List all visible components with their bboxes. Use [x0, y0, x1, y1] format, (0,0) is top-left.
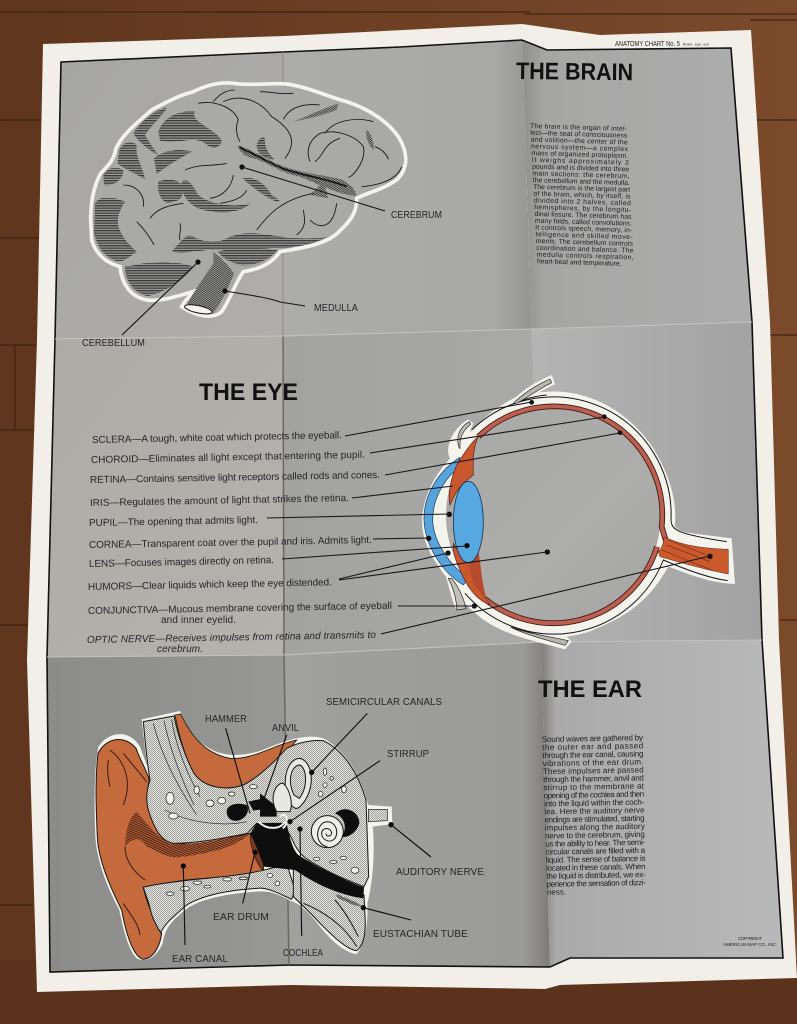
auditory nerve	[368, 809, 387, 822]
lens	[453, 481, 483, 563]
text block: ear description: endings are stimulated, starting	[544, 814, 645, 824]
diagram: brain	[91, 83, 406, 316]
text block: ear description: nerve to the cerebrum, giving	[545, 830, 645, 841]
eustachian tube bone	[293, 865, 365, 951]
text block: ear description: vibrations of the ear drum.	[543, 757, 644, 768]
text block: ear description: us the ability to hear. The semi-	[545, 838, 646, 849]
text block: eye part definitions: OPTIC NERVE—Receives impulses from retina and transmits to	[87, 630, 376, 646]
medulla cut	[184, 303, 213, 316]
text block: brain description: coordination and balance. The	[536, 245, 634, 255]
text block: eye part definitions: IRIS—Regulates the amount of light that strikes the retina.	[90, 493, 349, 509]
choroid and retina ring	[477, 406, 667, 623]
ear labels: HAMMER	[205, 714, 247, 725]
optic nerve	[658, 537, 728, 574]
text block: brain description: ments. The cerebellum controls	[536, 238, 634, 248]
text block: brain description: main sections: the cerebrum,	[532, 170, 630, 180]
text block: ear description: Sound waves are gathered by	[542, 733, 643, 744]
outer ear orange	[96, 739, 264, 959]
ear dots	[181, 770, 394, 910]
text block: eye part definitions: cerebrum.	[157, 644, 203, 655]
diagram: eye cross-section	[422, 375, 735, 649]
cornea	[424, 457, 468, 585]
text block: brain description: mass of organized protoplasm.	[531, 150, 629, 160]
text block: brain description: heart-beat and temperature.	[537, 258, 622, 268]
copyright note: AMERICAN MAP CO., INC.	[723, 942, 777, 947]
text block: brain description: lect—the seat of consciousness	[530, 130, 628, 140]
label: cerebellum: CEREBELLUM	[82, 338, 145, 349]
text block: brain description: medulla controls respiration,	[537, 252, 634, 261]
ear labels: EUSTACHIAN TUBE	[373, 929, 468, 940]
ear labels	[172, 697, 484, 965]
brain silhouette	[91, 83, 406, 316]
text block: ear description: perience the sensation of dizzi-	[547, 878, 646, 889]
eardrum	[250, 833, 264, 872]
text block: ear description: the outer ear and passed	[542, 741, 643, 752]
ossicle stapes	[258, 815, 287, 828]
eye dots	[426, 400, 713, 609]
upper eyelid	[513, 379, 552, 403]
text block: brain description: dinal fissure. The cerebrum has	[534, 211, 632, 221]
text block: brain description: of the brain, which, by itself, is	[533, 191, 631, 201]
text block: brain description: It controls speech, memory, in-	[535, 224, 632, 234]
text block: ear description: the liquid is distributed, we ex-	[546, 870, 646, 881]
text block: ear description: stirrup to the membrane at	[543, 782, 645, 792]
text block: brain description: The cerebrum is the largest part	[533, 184, 630, 194]
text block: brain description: divided into 2 halves, called	[534, 197, 631, 207]
text block: ear description: ness.	[547, 888, 566, 897]
ear labels: EAR CANAL	[172, 954, 228, 965]
ear labels: STIRRUP	[387, 749, 429, 760]
ear folds	[108, 750, 147, 935]
leader lines: brain	[122, 164, 385, 335]
title: the brain: THE BRAIN	[516, 58, 633, 86]
text block: brain description: many folds, called convolutions.	[535, 218, 632, 228]
chart number header: Brain, eye, ear	[683, 42, 710, 46]
text block: brain description: telligence and skilled move-	[536, 231, 633, 241]
ear leader lines	[183, 713, 431, 945]
text block: eye part definitions: HUMORS—Clear liquids which keep the eye distended.	[88, 577, 332, 593]
text block: ear description: These impulses are passed	[543, 765, 644, 776]
semicircular canals	[273, 758, 311, 812]
diagram: ear cross-section	[95, 711, 431, 960]
text block: brain description	[526, 123, 638, 268]
text block: brain description: and volition—the center of the	[531, 137, 628, 146]
ear labels: EAR DRUM	[213, 912, 269, 923]
text block: ear description: lea. Here the auditory nerve	[544, 806, 645, 816]
text block: ear description	[542, 733, 647, 897]
text block: eye part definitions: PUPIL—The opening that admits light.	[89, 515, 258, 529]
text block: brain description: pounds and is divided into three	[532, 164, 629, 173]
copyright note: COPYRIGHT	[738, 936, 762, 941]
text block: brain description: It weighs approximately 3	[532, 157, 629, 167]
text block: eye part definitions: SCLERA—A tough, white coat which protects the eyeball.	[92, 430, 342, 446]
ear canal shading	[125, 812, 249, 857]
text block: ear description: through the hammer, anvil and	[543, 773, 644, 784]
text block: eye part definitions: CHOROID—Eliminates all light except that entering the pupil.	[91, 450, 365, 466]
top orange area	[175, 714, 297, 788]
ear labels: AUDITORY NERVE	[396, 867, 484, 878]
iris upper and ciliary	[449, 437, 478, 505]
text block: eye part definitions: CORNEA—Transparent coat over the pupil and iris. Admits light.	[89, 535, 372, 551]
leader lines: eye	[267, 402, 710, 634]
bottom lid	[511, 627, 568, 645]
eye white outline	[422, 375, 735, 649]
ear labels: SEMICIRCULAR CANALS	[326, 697, 442, 708]
text block: ear description: circular canals are filled with a	[546, 846, 646, 857]
sclera outline	[465, 395, 728, 642]
title: the ear: THE EAR	[538, 676, 642, 703]
text block: eye part definitions: CONJUNCTIVA—Mucous membrane covering the surface of eyeball	[88, 601, 392, 617]
text block: brain description: nervous system—a complex	[531, 143, 629, 153]
text block: eye part definitions: LENS—Focuses images directly on retina.	[89, 555, 274, 570]
eyeball interior	[446, 408, 661, 623]
hammer	[227, 793, 277, 821]
title: the eye: THE EYE	[199, 379, 298, 406]
label: cerebrum: CEREBRUM	[391, 210, 442, 221]
text block: brain description: the cerebellum and the medulla.	[533, 177, 630, 187]
brain shading	[94, 103, 374, 313]
chart number header: ANATOMY CHART No. 5	[615, 41, 680, 48]
cochlea spiral	[311, 816, 343, 848]
text block: ear description: liquid. The sense of balance is	[546, 854, 646, 865]
text block: brain description: The brain is the organ of intel-	[530, 123, 627, 133]
text block: brain description: hemispheres, by the longitu-	[534, 204, 631, 214]
ear labels: COCHLEA	[283, 948, 323, 959]
text block: eye part definitions: RETINA—Contains sensitive light receptors called rods and cones.	[90, 470, 380, 486]
lower lid	[448, 578, 466, 610]
label: medulla: MEDULLA	[314, 303, 358, 314]
cochlea black shading	[335, 809, 359, 837]
brain sulci	[123, 90, 402, 245]
ear white outline	[95, 711, 392, 960]
small upper lid	[458, 422, 471, 448]
copyright note	[723, 936, 777, 947]
upper temporal bone	[143, 716, 369, 887]
ear labels: ANVIL	[272, 723, 299, 734]
text block: ear description: located in these canals. When	[546, 862, 646, 873]
text block: eye part definitions: and inner eyelid.	[161, 615, 236, 626]
bone air cells	[166, 768, 359, 895]
text block: ear description: into the liquid within the coch-	[544, 798, 645, 808]
text block: eye part definitions	[87, 430, 392, 655]
bone canal lines	[153, 719, 247, 824]
iris lower and ciliary	[453, 543, 490, 605]
text block: ear description: opening of the cochlea and then	[544, 790, 644, 800]
text block: ear description: through the ear canal, causing	[542, 749, 644, 760]
text block: ear description: impulses along the auditory	[545, 822, 645, 833]
middle ear black cavity	[250, 823, 364, 898]
lower bone	[143, 863, 295, 933]
